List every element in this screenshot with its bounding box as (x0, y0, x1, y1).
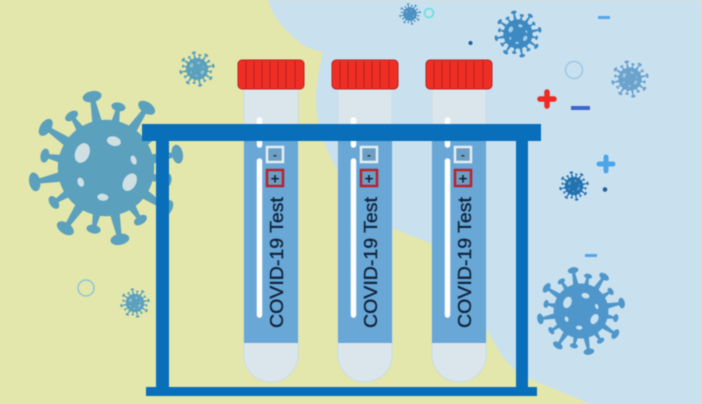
icon: light plus (599, 157, 613, 171)
test tube 2 (332, 60, 398, 382)
tube label band (432, 139, 486, 343)
ring: lower left (78, 280, 94, 296)
icon: light minus top (598, 16, 610, 19)
plus box (267, 170, 283, 188)
virus: small top center (398, 2, 422, 26)
tube glass (338, 88, 392, 382)
test tube 3 (426, 60, 492, 382)
ring: cyan top (424, 8, 434, 18)
tube glass (432, 88, 486, 382)
virus: large lower right (536, 266, 626, 356)
tube glass (244, 88, 298, 382)
virus: large left (28, 90, 184, 246)
minus box: - (367, 150, 371, 162)
virus: small lower left (120, 288, 150, 318)
red cap (332, 60, 398, 89)
test tube rack (142, 124, 541, 396)
virus: small upper left (178, 50, 216, 88)
background: pale blue blob (268, 0, 702, 404)
virus: right pale (610, 60, 650, 98)
white highlight (257, 120, 262, 315)
icon: light minus lower (585, 254, 597, 257)
tube text: COVID-19 Test (455, 197, 475, 328)
white highlight (351, 120, 356, 315)
rack right leg (516, 141, 528, 390)
plus box (455, 170, 471, 188)
tube text: COVID-19 Test (267, 197, 287, 328)
dot: top (468, 41, 472, 45)
tube text: COVID-19 Test (361, 197, 381, 328)
minus box (267, 147, 283, 162)
icon: red plus (540, 92, 554, 106)
virus: small dark right (558, 170, 590, 202)
plus box: + (365, 170, 374, 188)
minus box: - (461, 150, 465, 162)
dot: right (603, 187, 607, 192)
red cap (238, 60, 304, 89)
rack bottom bar (146, 387, 537, 396)
minus box (455, 147, 471, 162)
rack top bar (142, 124, 541, 141)
test tube 1 (238, 60, 304, 382)
tube label band (244, 139, 298, 343)
white highlight (445, 120, 450, 315)
virus: top right (494, 10, 542, 58)
ring: right blue (566, 62, 582, 78)
icon: blue minus (571, 106, 590, 110)
rack left leg (156, 141, 169, 390)
minus box (361, 147, 377, 162)
red cap (426, 60, 492, 89)
tube label band (338, 139, 392, 343)
minus box: - (273, 150, 277, 162)
plus box: + (459, 170, 468, 188)
plus box (361, 170, 377, 188)
plus box: + (271, 170, 280, 188)
